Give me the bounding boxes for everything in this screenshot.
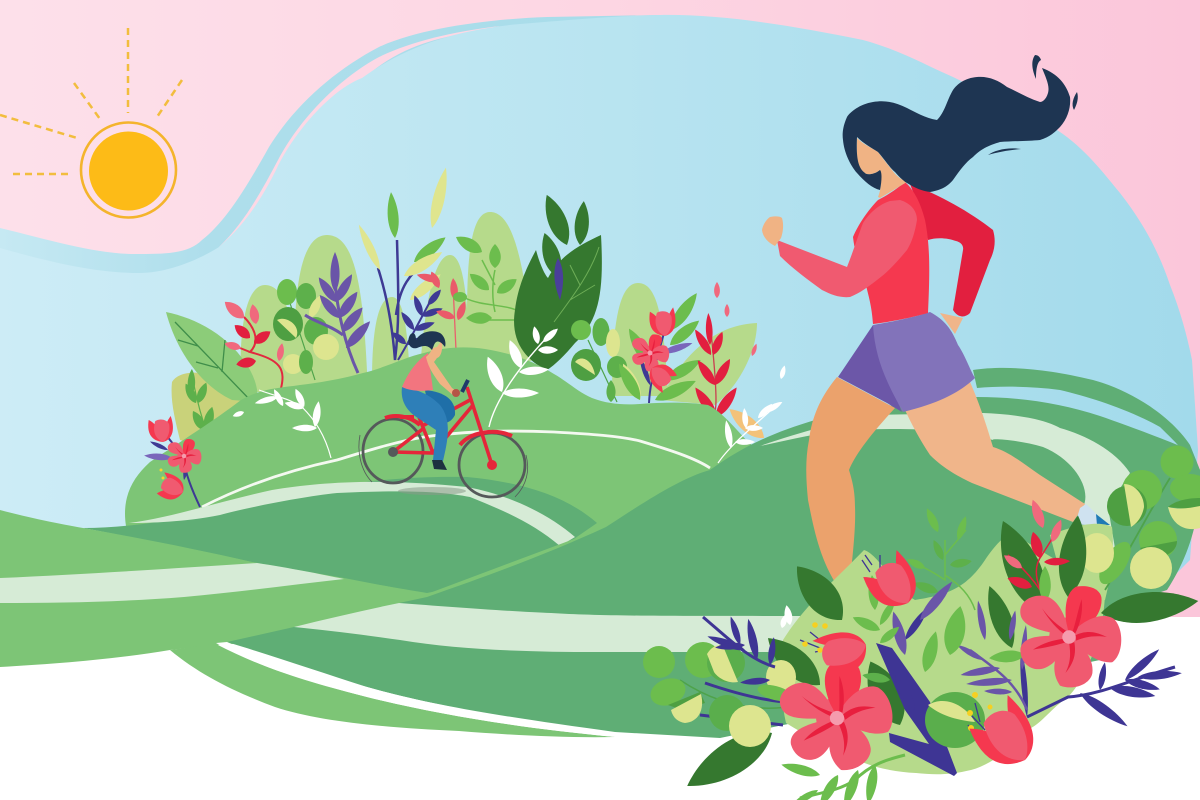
- sun: [0, 28, 182, 218]
- back foliage blobs: [240, 212, 757, 405]
- plant: tall indigo stalk with yellow leaves: [355, 166, 452, 360]
- bouquet: dark leaves: [678, 514, 1200, 800]
- plant: red sprig: [221, 297, 285, 392]
- bouquet: left round-leaf branch: [643, 642, 801, 747]
- bouquet: green accent leaves: [851, 575, 1026, 748]
- plant: left flowers: [144, 416, 201, 507]
- jogger: shorts: [838, 312, 975, 412]
- bouquet: tulips and stamens: [800, 548, 1045, 777]
- plant: big dark leaves: [514, 192, 602, 370]
- hills: trail over mound: [129, 482, 575, 546]
- hills: front right hill: [227, 397, 1200, 738]
- plant: right flowers: [614, 290, 704, 406]
- sky band: pale blue ribbon: [0, 15, 700, 300]
- plant: big veined leaf: [166, 312, 257, 402]
- bouquet: hibiscus flowers: [773, 586, 1121, 783]
- jogger: skin of face and neck: [857, 138, 907, 198]
- jogger: front leg: [806, 377, 895, 592]
- jogger: shoe: [1075, 504, 1110, 527]
- bouquet: lavender fern: [888, 579, 1029, 710]
- plant: left green stalk: [182, 369, 233, 490]
- jogger: back arm: [910, 184, 995, 316]
- hills: white ribbon: [216, 642, 615, 737]
- plant: right round-leaf branch: [571, 318, 645, 402]
- jogger: back leg: [905, 382, 1085, 522]
- hills: central dark mound: [83, 477, 597, 593]
- jogger: fist: [762, 216, 783, 246]
- cyclist on red bicycle: [359, 331, 528, 497]
- jogger: front arm: [777, 200, 917, 297]
- bouquet: right round-leaf branch: [1050, 446, 1200, 610]
- bouquet: white leaves: [779, 605, 794, 629]
- plant: white sprig centre: [482, 326, 560, 427]
- plant: white sprig right: [718, 399, 784, 463]
- hills: left trail: [0, 563, 344, 603]
- small drifting petals: [714, 282, 787, 380]
- plant: green vine: [453, 232, 535, 327]
- bouquet: small green vine: [905, 507, 975, 610]
- sky sliver: pink ribbon: [219, 26, 500, 247]
- hills: central trail: [294, 603, 800, 652]
- plant: small red sprig: [416, 270, 468, 350]
- white ground: [0, 617, 1200, 800]
- hills: pale white trail line: [202, 431, 710, 507]
- plant: purple fern: [305, 252, 374, 373]
- jogger: hair: [843, 55, 1078, 192]
- hills: left slope: [0, 510, 610, 667]
- hills: winding right trail: [760, 413, 1130, 560]
- jogger: back hand: [940, 313, 963, 334]
- plant: round-leaf branch: [273, 279, 339, 380]
- jogger: torso: [853, 182, 929, 324]
- bouquet: indigo ferns: [703, 605, 1182, 776]
- hills: light ribbon under the ground: [170, 644, 615, 737]
- bouquet: pale green background shape: [780, 533, 1105, 774]
- plant: dark indigo fern: [390, 288, 444, 360]
- plant: red leaves stalk: [691, 313, 741, 460]
- plant: orange leaf: [725, 403, 769, 444]
- ring: outer back path: [973, 368, 1200, 470]
- plant: olive blob: [172, 373, 247, 443]
- plant: white sprig left: [232, 387, 331, 458]
- hills: back light green hill: [125, 347, 790, 610]
- bouquet: bottom fern: [780, 731, 905, 800]
- bouquet: red sprig: [1002, 498, 1070, 602]
